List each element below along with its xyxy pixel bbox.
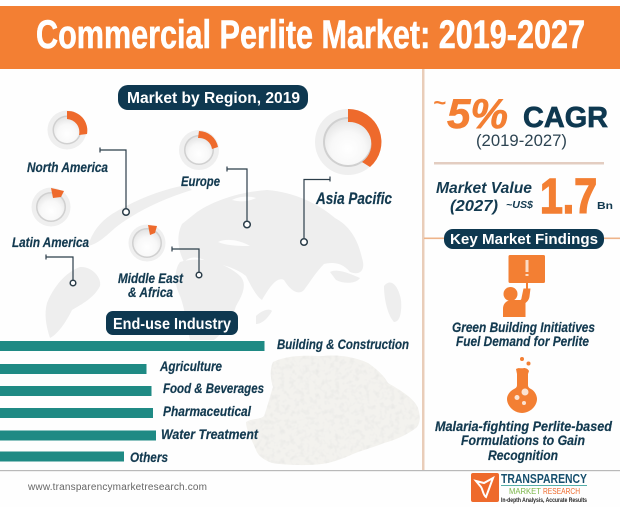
label: Europe: Europe bbox=[181, 174, 220, 189]
donut: Latin America bbox=[32, 188, 70, 226]
label: Water Treatment: Water Treatment bbox=[161, 427, 258, 442]
label: Asia Pacific: Asia Pacific bbox=[315, 190, 392, 208]
finding text: green building bbox=[452, 320, 595, 349]
connector: Latin America bbox=[46, 254, 76, 286]
heading: Market by Region: Market by Region, 2019 bbox=[127, 90, 300, 107]
CAGR stat: (2019-2027) bbox=[476, 131, 567, 150]
label: Middle East and Africa: Middle East bbox=[118, 271, 183, 286]
heading: Market by Region bbox=[118, 85, 308, 110]
finding text: malaria: Formulations to Gain bbox=[461, 433, 585, 448]
bar: Water Treatment bbox=[0, 430, 156, 440]
CAGR stat: CAGR bbox=[523, 102, 608, 134]
bar: Agriculture bbox=[0, 364, 146, 374]
CAGR stat bbox=[433, 90, 608, 150]
label: Agriculture: Agriculture bbox=[159, 359, 222, 374]
heading: End-use Industry bbox=[106, 311, 238, 335]
icon: person raising alert sign bbox=[503, 255, 545, 317]
label: Middle East and Africa: & Africa bbox=[128, 285, 173, 300]
donut: Middle East and Africa bbox=[128, 224, 166, 262]
connector: Asia Pacific bbox=[301, 176, 330, 245]
market value stat: (2027) bbox=[450, 198, 498, 215]
market value stat: Market Value bbox=[436, 180, 532, 197]
connector: Middle East and Africa bbox=[172, 246, 202, 278]
icon: flask bbox=[507, 357, 537, 413]
bar: Food and Beverages bbox=[0, 386, 152, 396]
market value stat: ~US$ bbox=[506, 199, 533, 211]
label: Food and Beverages: Food & Beverages bbox=[163, 381, 264, 396]
donut: Europe bbox=[179, 130, 219, 170]
map highlights bbox=[218, 197, 256, 246]
logo: Transparency Market Research: RESEARCH bbox=[543, 487, 580, 496]
market value stat: Bn bbox=[597, 200, 613, 212]
logo: Transparency Market Research: MARKET bbox=[509, 487, 541, 496]
connector: Europe bbox=[227, 166, 250, 228]
bar: Pharmaceutical bbox=[0, 408, 153, 418]
bar: Others bbox=[0, 452, 124, 462]
CAGR stat: ~ bbox=[433, 90, 446, 115]
heading: End-use Industry: End-use Industry bbox=[113, 316, 231, 333]
label: Middle East and Africa bbox=[118, 271, 183, 300]
label: Pharmaceutical: Pharmaceutical bbox=[163, 404, 251, 419]
market value stat: 1.7 bbox=[540, 170, 597, 224]
heading: Key Market Findings: Key Market Findings bbox=[450, 231, 598, 248]
website url: www.transparencymarketresearch.com bbox=[27, 482, 207, 493]
bar: Building and Construction bbox=[0, 341, 264, 351]
panel divider lines bbox=[0, 69, 620, 471]
finding text: green building: Green Building Initiatives bbox=[452, 320, 595, 335]
finding text: malaria bbox=[435, 419, 613, 463]
label: Others: Others bbox=[130, 450, 168, 465]
CAGR stat: 5% bbox=[447, 90, 508, 137]
perlite pellets image bbox=[246, 355, 420, 465]
bar chart: end-use industry bbox=[0, 337, 409, 465]
label: Building and Construction: Building & Construction bbox=[277, 337, 409, 352]
connector: North America bbox=[100, 148, 129, 215]
world map background bbox=[46, 185, 401, 340]
logo: Transparency Market Research bbox=[471, 471, 588, 504]
logo: Transparency Market Research: In-depth Analysis, Accurate Results bbox=[501, 498, 588, 504]
finding text: malaria: Recognition bbox=[488, 448, 558, 463]
donut: North America bbox=[48, 110, 87, 150]
market value stat bbox=[436, 170, 613, 224]
label: Latin America: Latin America bbox=[12, 235, 89, 250]
donut: Asia Pacific bbox=[315, 109, 381, 175]
title banner bbox=[0, 6, 620, 69]
finding text: malaria: Malaria-fighting Perlite-based bbox=[435, 419, 613, 434]
logo: Transparency Market Research: TRANSPARENCY bbox=[501, 471, 587, 486]
finding text: green building: Fuel Demand for Perlite bbox=[456, 334, 589, 349]
label: North America: North America bbox=[27, 160, 108, 175]
